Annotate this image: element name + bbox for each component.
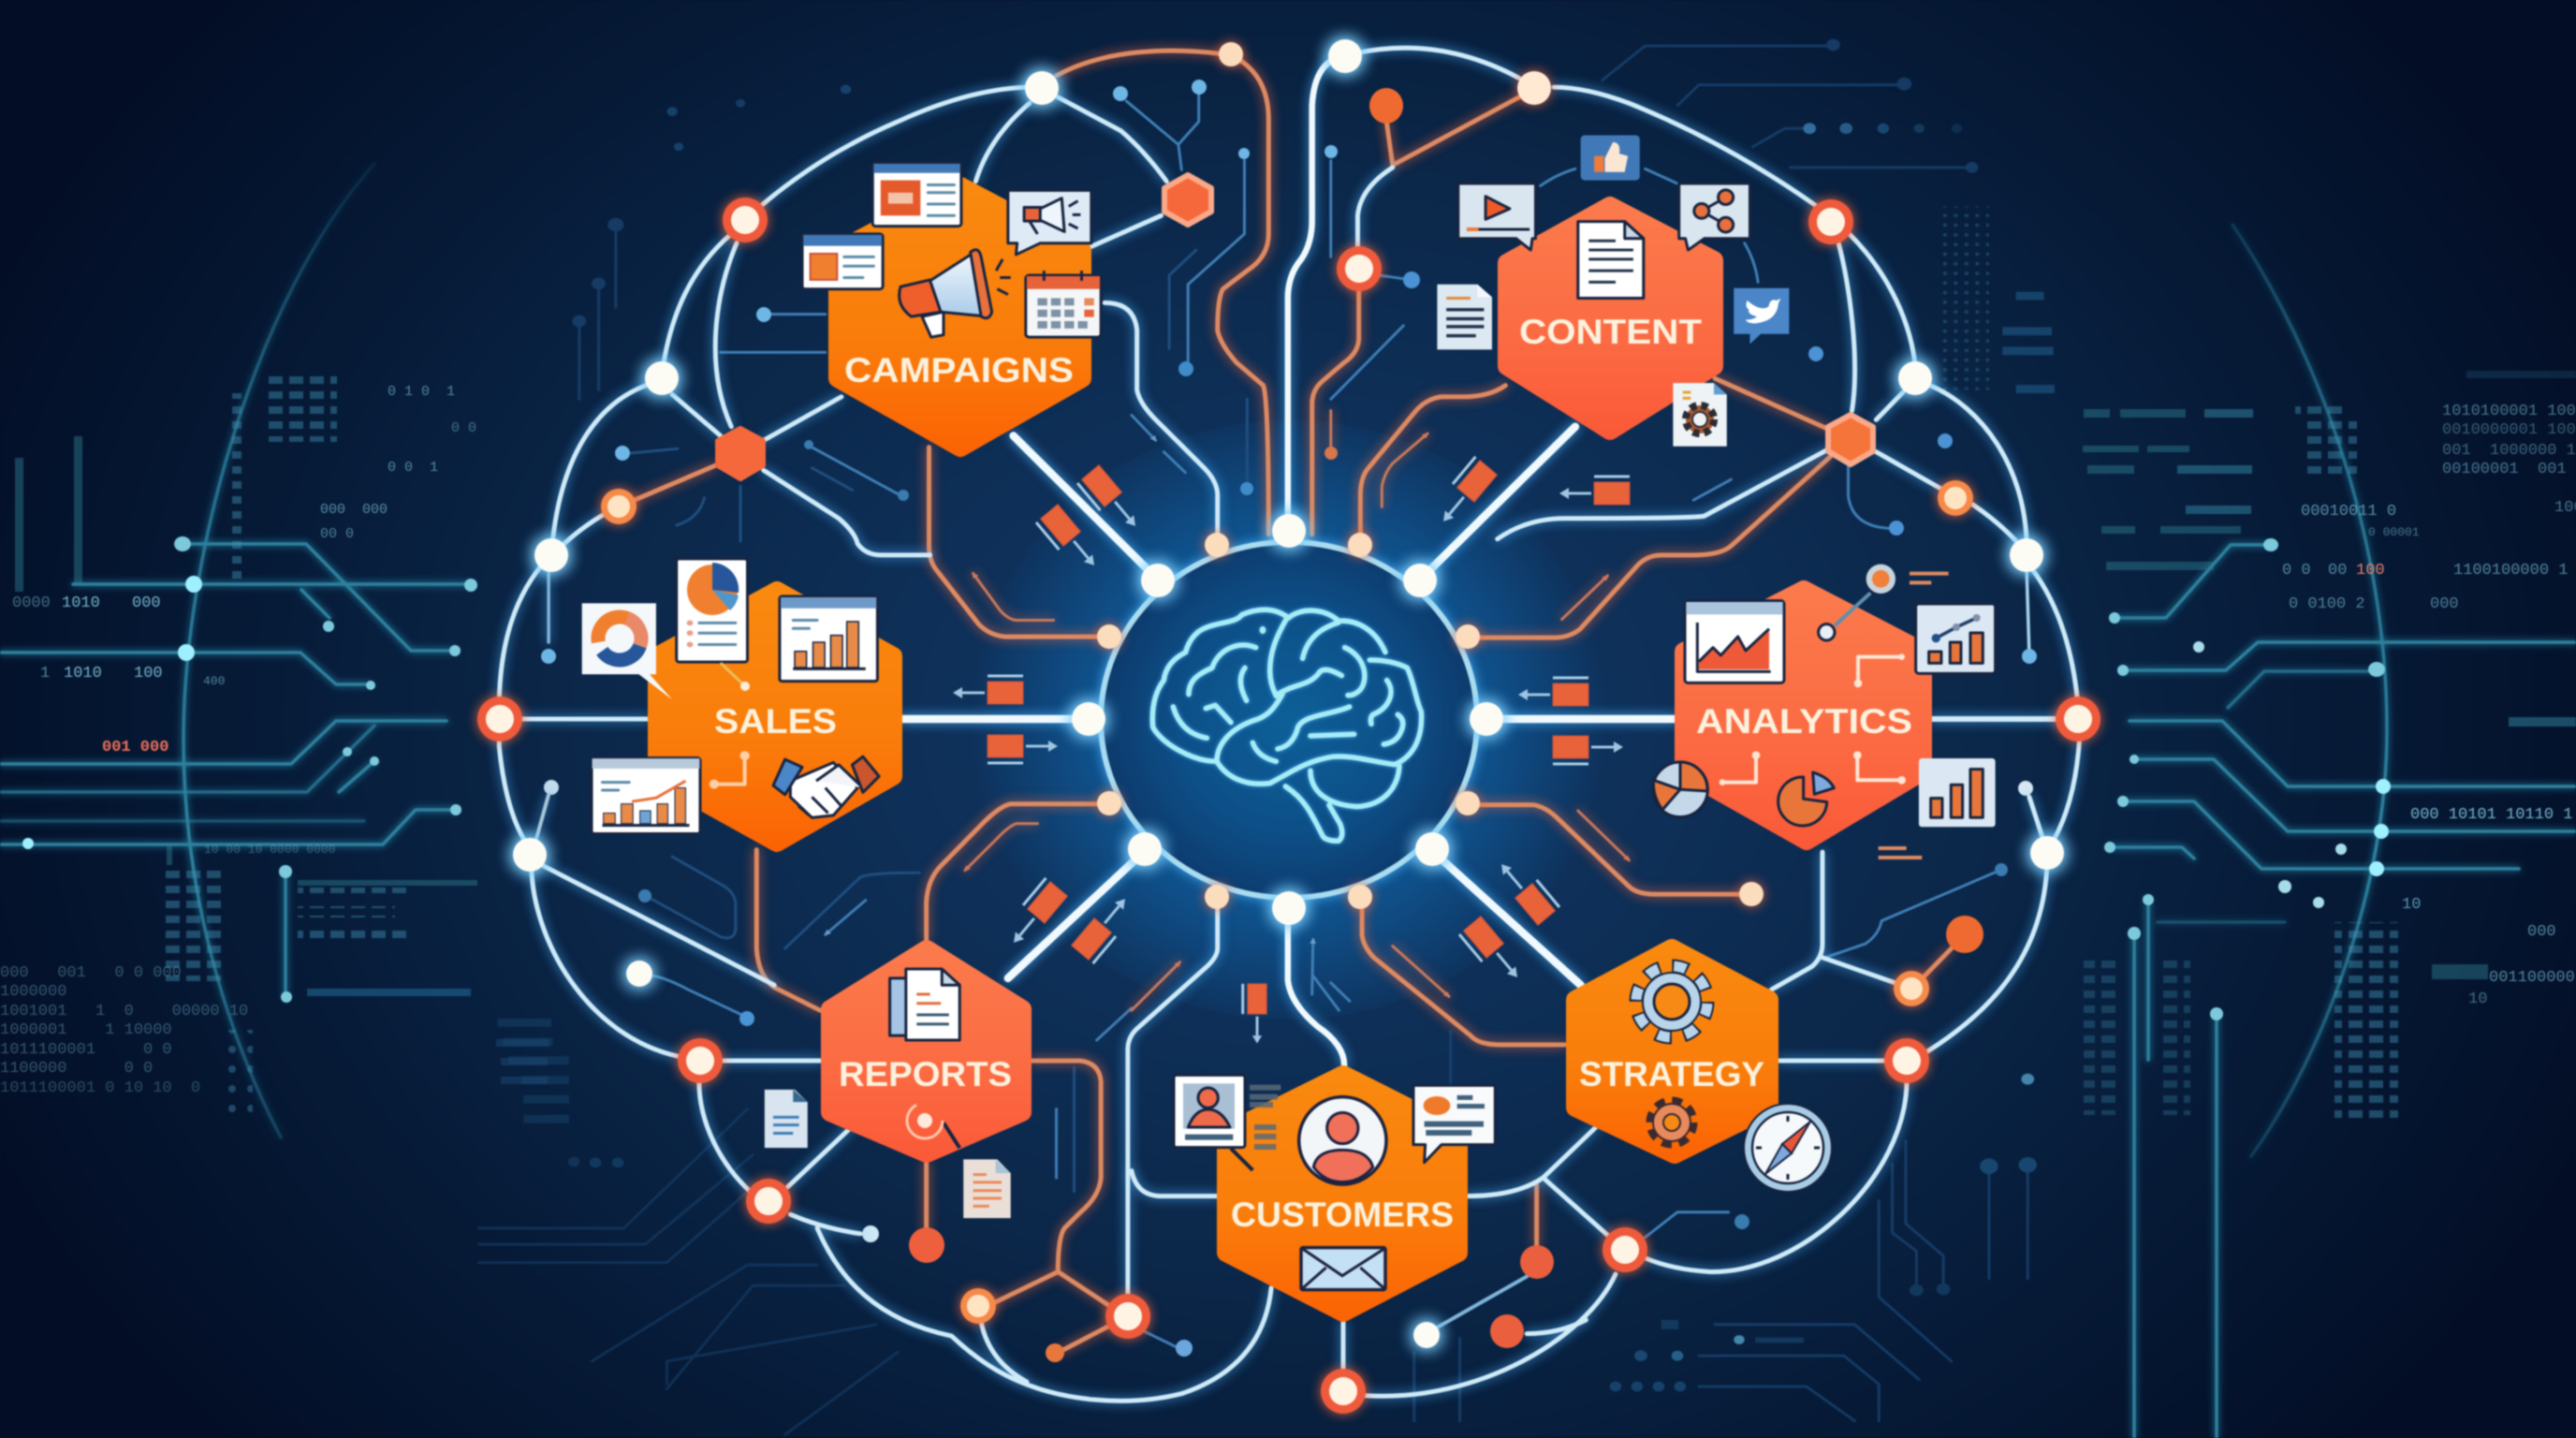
dim circuit details inside the scene xyxy=(478,39,2055,1434)
icon: orange document xyxy=(963,1159,1011,1218)
left binary text: 1000001 1 10000 xyxy=(0,1021,172,1039)
top left dim traces xyxy=(572,85,851,399)
left circuit traces xyxy=(0,164,471,1137)
hexagon xyxy=(1507,206,1714,431)
icon: video bubble xyxy=(1458,183,1535,250)
white network nodes xyxy=(513,39,2064,1348)
left binary text: 1011100001 0 0 xyxy=(0,1041,172,1059)
bottom right dim PCB traces xyxy=(1414,1031,2037,1421)
left binary text: 000 xyxy=(132,594,161,612)
icon: calendar xyxy=(1026,271,1101,337)
left binary text: 1 xyxy=(40,665,50,682)
top right dim traces xyxy=(1603,39,2055,393)
bottom left dim PCB traces xyxy=(478,1019,898,1434)
icon: bar chart window xyxy=(780,596,877,682)
sales icons lower xyxy=(592,751,879,833)
left binary text: 0 0 1 xyxy=(388,460,438,476)
hexagon xyxy=(1226,1075,1458,1313)
right binary text: 000 xyxy=(2527,923,2556,941)
left binary text: 1010 xyxy=(62,594,100,612)
icon: small gear xyxy=(1651,1102,1692,1143)
icon: side document xyxy=(1437,285,1492,349)
right data blocks xyxy=(2083,371,2576,1119)
left binary text: 1011100001 0 10 10 0 xyxy=(0,1079,200,1097)
data packet markers along spokes xyxy=(953,457,1630,1044)
icon: report card xyxy=(677,559,747,686)
icon: document xyxy=(1578,222,1644,298)
central brain circle xyxy=(1101,542,1477,898)
hub: content xyxy=(1437,136,1789,447)
icon: gear on document xyxy=(1686,405,1714,433)
icon: arrow connector xyxy=(710,751,750,788)
right binary text: 100 xyxy=(2356,562,2385,580)
report icons xyxy=(765,969,1011,1218)
right binary text: 1010100001 100 xyxy=(2442,403,2576,420)
icon: donut card xyxy=(582,603,672,699)
left binary text: 100 xyxy=(134,665,163,682)
blue connectors top-left xyxy=(629,94,1247,541)
orange traces top-left xyxy=(629,51,1268,637)
right binary text: 00010011 0 xyxy=(2301,503,2396,521)
left binary text: 0 1 0 1 xyxy=(388,384,455,400)
right binary text: 001100000 xyxy=(2489,969,2575,987)
icon: bar card xyxy=(1919,758,1996,827)
orange brain network xyxy=(629,51,1952,1352)
left binary text: 0 0 xyxy=(451,420,476,436)
thin blue connectors xyxy=(541,80,2037,1357)
right circuit nodes xyxy=(2104,538,2391,1020)
hub: strategy xyxy=(1575,948,1832,1192)
hub: reports xyxy=(765,949,1022,1218)
left binary text: 00 0 xyxy=(320,526,354,542)
hub: sales xyxy=(582,559,893,843)
icon: thumbs up xyxy=(1581,136,1640,181)
right binary text: 000 10101 10110 1 xyxy=(2410,806,2572,824)
sales icons upper xyxy=(582,559,877,699)
right binary text: 000 xyxy=(2430,595,2459,613)
label: CUSTOMERS xyxy=(1231,1196,1454,1234)
blue connectors bottom-right xyxy=(1312,873,1995,1327)
label: STRATEGY xyxy=(1579,1055,1764,1093)
orange traces top-right xyxy=(1312,97,1831,638)
left binary text xyxy=(0,384,476,1097)
left binary text: 1010 xyxy=(64,665,102,682)
peach ring nodes xyxy=(1097,42,1764,909)
blue connectors top-right xyxy=(1331,161,2029,656)
right binary text: 00 xyxy=(2328,562,2347,580)
icon: connected node xyxy=(1819,565,1949,640)
icon: growth window xyxy=(592,758,700,833)
white traces top-left xyxy=(499,87,1218,719)
hexagon xyxy=(830,949,1022,1153)
blue connectors bottom-left xyxy=(645,857,1178,1347)
hub: customers xyxy=(1174,1075,1495,1313)
icon: envelope xyxy=(1301,1248,1385,1290)
icon: megaphone xyxy=(900,250,1011,337)
icon: megaphone bubble xyxy=(1008,190,1091,255)
icon: line chart window xyxy=(1685,601,1784,682)
icon: twitter bubble xyxy=(1734,288,1789,345)
hub: campaigns xyxy=(802,163,1101,448)
icon: handshake xyxy=(773,756,879,817)
left binary text: 1000000 xyxy=(0,983,66,1001)
left binary text: 1100000 0 0 xyxy=(0,1060,153,1078)
content icons xyxy=(1437,136,1789,447)
right binary text: 0 0100 2 xyxy=(2289,595,2365,613)
icon: connector arrows xyxy=(1720,653,1906,785)
left circuit nodes xyxy=(22,536,477,1003)
left binary text: 10 00 10 0000 0000 xyxy=(204,843,335,857)
right binary text: 0010000001 100 xyxy=(2442,421,2576,439)
left binary text: 400 xyxy=(203,674,225,688)
orange ring nodes xyxy=(477,198,2100,1414)
white traces bottom-right xyxy=(1288,741,2079,1396)
icon: profile card xyxy=(1174,1075,1281,1170)
icon: donut chart xyxy=(593,611,647,666)
label: SALES xyxy=(714,702,837,741)
right binary text: 00100001 001 xyxy=(2442,461,2567,478)
hexagon xyxy=(1684,590,1923,841)
right binary text: 0 00001 xyxy=(2368,525,2420,539)
right binary text xyxy=(2282,403,2576,1008)
icon: pie chart xyxy=(687,563,739,615)
left binary text: 001 000 xyxy=(102,739,168,756)
right binary text: 0 0 xyxy=(2282,562,2311,580)
orange traces bottom-right xyxy=(1362,805,1952,1247)
icon: ad window xyxy=(872,163,961,227)
left binary text: 0000 xyxy=(12,594,51,612)
icon: landing window xyxy=(802,234,883,289)
left binary text: 000 000 xyxy=(320,502,388,518)
central blue halo xyxy=(971,420,1607,1020)
icon: share bubble xyxy=(1679,183,1749,250)
icon: avatar xyxy=(1299,1097,1386,1184)
icon: message bubble xyxy=(1413,1085,1495,1163)
label: REPORTS xyxy=(839,1055,1012,1093)
horizontal spokes xyxy=(500,715,2078,723)
ring xyxy=(1101,542,1477,898)
label: CONTENT xyxy=(1519,313,1702,351)
hexagon xyxy=(1575,948,1769,1154)
label: CAMPAIGNS xyxy=(844,351,1074,389)
left tech decoration xyxy=(0,164,549,1137)
callout bars xyxy=(1879,848,1922,858)
small orange dots xyxy=(909,88,1983,1362)
icon: pie chart xyxy=(1653,762,1707,817)
icon: target pointer xyxy=(944,1123,959,1148)
right circuit traces xyxy=(2110,225,2576,1438)
hexagon xyxy=(657,591,893,843)
icon: document stack xyxy=(890,969,959,1040)
white traces bottom-left xyxy=(499,719,1271,1401)
label: ANALYTICS xyxy=(1696,702,1912,741)
icon: compass xyxy=(1744,1104,1832,1192)
icon: target xyxy=(907,1103,943,1138)
icon: blue document xyxy=(765,1090,808,1148)
right binary text: 10 xyxy=(2468,990,2487,1008)
icon: trend bar card xyxy=(1916,604,1996,673)
right binary text: 1100100000 1 xyxy=(2453,562,2568,580)
left data blocks xyxy=(15,376,549,1123)
hub: analytics xyxy=(1653,565,1996,858)
white brain network xyxy=(499,48,2079,1401)
right binary text: 10 xyxy=(2402,896,2421,914)
brain icon xyxy=(1152,609,1422,841)
hexagon xyxy=(838,186,1082,448)
campaign icons xyxy=(802,163,1101,337)
icon: gear document xyxy=(1673,383,1727,447)
blue endpoint dots xyxy=(541,80,2037,1357)
icon: large gear xyxy=(1636,966,1707,1037)
right tech decoration xyxy=(2083,225,2576,1438)
analytics icons xyxy=(1653,565,1996,858)
icon: pie wedge xyxy=(1778,772,1834,826)
small hexagon nodes xyxy=(718,175,1873,478)
orange traces bottom-left xyxy=(756,804,1180,1352)
left binary text: 1001001 1 0 00000 10 xyxy=(0,1003,248,1020)
left binary text: 000 001 0 0 000 xyxy=(0,964,182,982)
white traces top-right xyxy=(1288,48,2078,702)
